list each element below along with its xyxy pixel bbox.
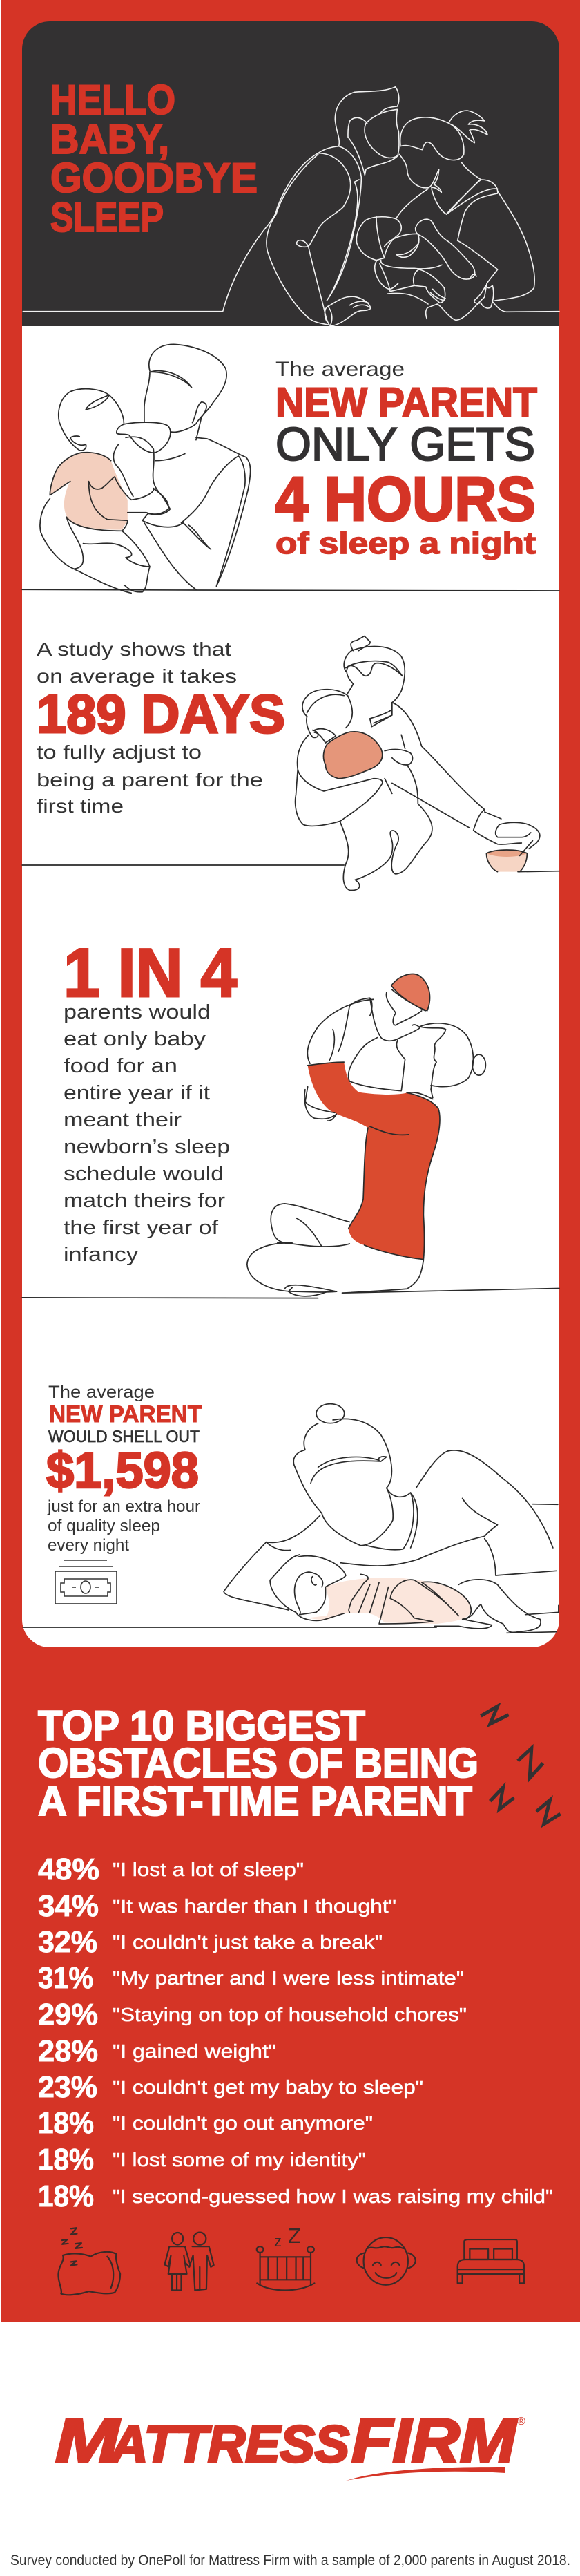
stat: 31% xyxy=(38,1961,464,1995)
text block: 4 hours xyxy=(276,358,537,560)
stat: 23% xyxy=(38,2070,423,2104)
stat: 48%: "I lost a lot of sleep" xyxy=(113,1859,304,1880)
text block: 4 hours: The average xyxy=(276,358,405,381)
stat: 18% second-guessed xyxy=(38,2179,553,2213)
panel: 4 hours of sleep xyxy=(22,344,559,593)
text block: $1,598: WOULD SHELL OUT xyxy=(48,1428,200,1446)
text block: $1,598: The average xyxy=(48,1383,155,1402)
logo: Mattress Firm: ® xyxy=(517,2416,525,2427)
text block: 1 in 4: entire year if it xyxy=(64,1082,210,1104)
heading xyxy=(38,1703,478,1824)
text block: 4 hours: NEW PARENT xyxy=(276,379,537,426)
panel: 1 in 4 xyxy=(22,934,559,1298)
illustration: parent feeding baby xyxy=(22,636,559,891)
illustration: parent resting beside baby xyxy=(23,1404,559,1633)
icon: baby face xyxy=(357,2237,416,2285)
text block: 189 days: A study shows that xyxy=(37,638,231,660)
text block: 189 days xyxy=(37,638,285,817)
text block: 1 in 4: match theirs for xyxy=(64,1190,225,1212)
text block: 4 hours: ONLY GETS xyxy=(276,418,535,471)
text block: 1 in 4: meant their xyxy=(64,1109,182,1131)
stat: 32%: "I couldn't just take a break" xyxy=(113,1931,383,1953)
text block: 1 in 4: the first year of xyxy=(64,1217,219,1239)
illustration: parent lifting baby xyxy=(22,974,559,1298)
text block: 189 days: being a parent for the xyxy=(37,769,263,790)
list: obstacles xyxy=(38,1853,553,2213)
text block: 189 days: 189 DAYS xyxy=(37,683,285,744)
logo: Mattress Firm: FIRM xyxy=(351,2407,517,2476)
stat: 29%: 29% xyxy=(38,1998,98,2032)
icon: floating sleep marks xyxy=(481,1706,561,1824)
stat: 29% xyxy=(38,1998,467,2032)
stat: 48% xyxy=(38,1853,304,1886)
logo: Mattress Firm: ATTRESS xyxy=(109,2415,349,2473)
stat: 18% identity xyxy=(38,2143,366,2177)
title: SLEEP xyxy=(50,194,164,240)
text block: $1,598: of quality sleep xyxy=(48,1517,160,1535)
stat: 34%: 34% xyxy=(38,1889,99,1923)
panel: $1,598 xyxy=(23,1383,559,1633)
icon: crib xyxy=(257,2224,314,2290)
text block: 189 days: first time xyxy=(37,795,124,817)
icon: banknote xyxy=(55,1560,117,1604)
title: BABY, xyxy=(50,116,169,162)
stat: 29%: "Staying on top of household chores" xyxy=(113,2004,467,2025)
text block: $1,598: every night xyxy=(48,1536,129,1555)
stat: 31%: "My partner and I were less intimate" xyxy=(113,1967,464,1989)
icon: crib: Z xyxy=(288,2224,301,2248)
stat: 28%: "I gained weight" xyxy=(113,2040,276,2062)
illustration: parents holding baby xyxy=(23,87,559,326)
icon row xyxy=(58,2224,524,2295)
text block: 189 days: to fully adjust to xyxy=(37,741,202,763)
stat: 34% xyxy=(38,1889,396,1923)
stat: 31%: 31% xyxy=(38,1961,93,1995)
text block: 1 in 4: eat only baby xyxy=(64,1028,206,1050)
panel: top 10 obstacles xyxy=(38,1703,561,2295)
text block: 1 in 4: schedule would xyxy=(64,1163,224,1185)
stat: 48%: 48% xyxy=(38,1853,99,1886)
logo: Mattress Firm xyxy=(55,2407,525,2481)
icon: crib: z xyxy=(274,2233,282,2250)
heading: TOP 10 BIGGEST xyxy=(38,1703,365,1749)
text block: 1 in 4: parents would xyxy=(64,1001,211,1023)
text block: $1,598: just for an extra hour xyxy=(47,1497,200,1516)
stat: 18% second-guessed: 18% xyxy=(38,2179,94,2213)
stat: 23%: "I couldn't get my baby to sleep" xyxy=(113,2076,423,2098)
text block: $1,598: $1,598 xyxy=(46,1443,199,1499)
icon: couple xyxy=(164,2233,214,2290)
text block: $1,598 xyxy=(46,1383,202,1555)
text block: $1,598: NEW PARENT xyxy=(49,1401,202,1428)
stat: 18% going out: "I couldn't go out anymore" xyxy=(113,2112,373,2134)
stat: 28%: 28% xyxy=(38,2034,98,2068)
text block: 189 days: on average it takes xyxy=(37,665,237,687)
stat: 18% going out xyxy=(38,2106,373,2140)
logo: Mattress Firm: M xyxy=(55,2407,120,2476)
text block: 4 hours: 4 HOURS xyxy=(276,465,536,534)
stat: 32% xyxy=(38,1925,383,1959)
text block: 1 in 4: 1 IN 4 xyxy=(64,934,237,1011)
title: HELLO xyxy=(50,77,175,123)
illustration: father and baby xyxy=(22,344,559,593)
text block: 1 in 4: food for an xyxy=(64,1055,177,1077)
stat: 28% xyxy=(38,2034,276,2068)
panel: 189 days xyxy=(22,636,559,891)
stat: 23%: 23% xyxy=(38,2070,97,2104)
text block: 4 hours: of sleep a night xyxy=(276,527,536,560)
icon: bed xyxy=(458,2239,524,2283)
text block: 1 in 4: infancy xyxy=(64,1244,139,1266)
title: GOODBYE xyxy=(50,155,258,201)
text block: 1 in 4 xyxy=(64,934,237,1266)
panel: white stats background xyxy=(22,326,559,1647)
title xyxy=(50,77,258,240)
stat: 18% going out: 18% xyxy=(38,2106,94,2140)
text block: 1 in 4: newborn’s sleep xyxy=(64,1136,230,1158)
heading: A FIRST-TIME PARENT xyxy=(38,1778,472,1824)
stat: 34%: "It was harder than I thought" xyxy=(113,1895,396,1917)
stat: 18% identity: 18% xyxy=(38,2143,94,2177)
stat: 18% identity: "I lost some of my identity" xyxy=(113,2149,366,2170)
icon: pillow xyxy=(58,2228,120,2295)
heading: OBSTACLES OF BEING xyxy=(38,1740,478,1786)
stat: 32%: 32% xyxy=(38,1925,97,1959)
panel: hero xyxy=(22,21,559,326)
stat: 18% second-guessed: "I second-guessed how I was raising my child" xyxy=(113,2186,553,2207)
